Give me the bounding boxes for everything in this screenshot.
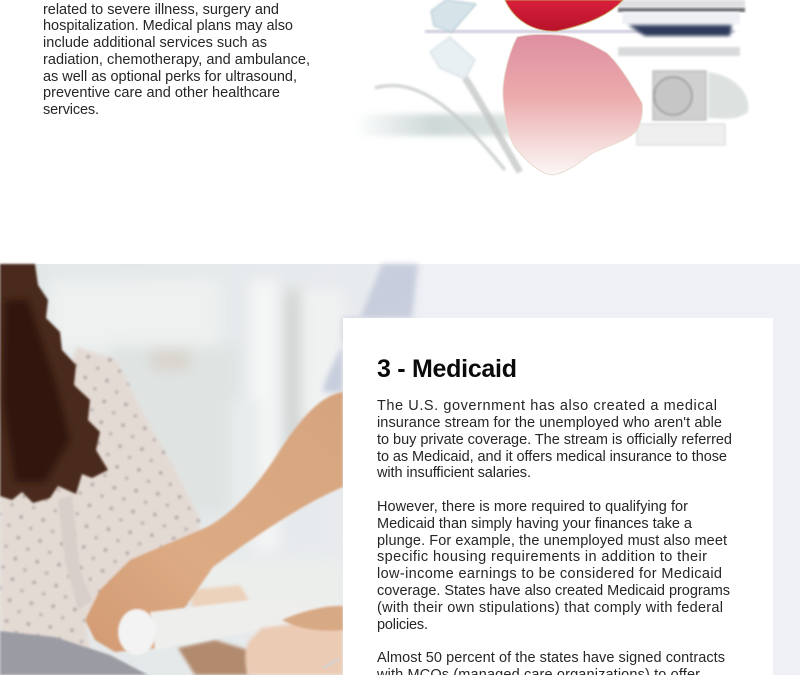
patient forearm [178, 640, 248, 675]
tube connector [431, 0, 476, 32]
red heart [505, 0, 623, 31]
paragraph 2: plunge. For example, the unemployed must also meet [377, 533, 727, 549]
paragraph 2: Medicaid than simply having your finances take a [377, 516, 693, 532]
paragraph 2: coverage. States have also created Medicaid programs [377, 583, 730, 599]
paragraph 1: with insufficient salaries. [376, 465, 531, 481]
blanket [0, 631, 148, 675]
gown tie [58, 495, 92, 610]
text block: medical plans intro: hospitalization. Medical plans may also [43, 18, 293, 34]
nurse arm [85, 392, 343, 652]
nurse fingers [282, 606, 343, 631]
page background [0, 0, 800, 264]
text block: medical plans intro: as well as optional perks for ultrasound, [43, 69, 297, 85]
paragraph 1: to buy private coverage. The stream is officially referred [377, 432, 732, 448]
hair [0, 264, 108, 503]
paragraph 2 [377, 499, 730, 633]
paragraph 2: policies. [377, 617, 428, 633]
illustration: heart and stethoscope with reflection [355, 0, 749, 175]
text block: medical plans intro [43, 2, 310, 118]
nurse scrubs [322, 264, 418, 392]
text block: medical plans intro: include additional services such as [43, 35, 267, 51]
patient hand [246, 620, 343, 675]
text block: medical plans intro: related to severe illness, surgery and [43, 2, 279, 18]
reflected heart [503, 34, 642, 175]
paragraph 1 [376, 398, 732, 481]
paragraph 3: Almost 50 percent of the states have signed contracts [377, 650, 725, 666]
paragraph 1: to as Medicaid, and it offers medical insurance to those [377, 449, 727, 465]
bandage strip [150, 600, 343, 650]
paragraph 1: insurance stream for the unemployed who aren't able [377, 415, 722, 431]
paragraph 2: specific housing requirements in addition to their [377, 549, 707, 565]
paragraph 1: The U.S. government has also created a medical [377, 398, 717, 414]
reflected tube connector [375, 37, 520, 172]
heading: 3 - Medicaid [377, 355, 517, 383]
photo: nurse bandaging patient's wrist [0, 264, 800, 675]
text block: medical plans intro: services. [43, 102, 99, 118]
floor shadow [355, 114, 515, 136]
stethoscope chest piece [618, 0, 745, 36]
patient gown [0, 347, 200, 650]
text block: medical plans intro: radiation, chemotherapy, and ambulance, [43, 52, 310, 68]
paragraph 2: (with their own stipulations) that comply with federal [377, 600, 723, 616]
reflected stethoscope [618, 47, 749, 145]
blurred hospital background [50, 280, 343, 620]
text block: medical plans intro: preventive care and other healthcare [43, 85, 280, 101]
bandage roll [118, 609, 156, 655]
panel: 3 - Medicaid [343, 318, 773, 675]
ring [323, 659, 339, 668]
paragraph 3 [376, 650, 725, 675]
paragraph 2: However, there is more required to qualifying for [377, 499, 688, 515]
paragraph 2: low-income earnings to be considered for Medicaid [377, 566, 722, 582]
